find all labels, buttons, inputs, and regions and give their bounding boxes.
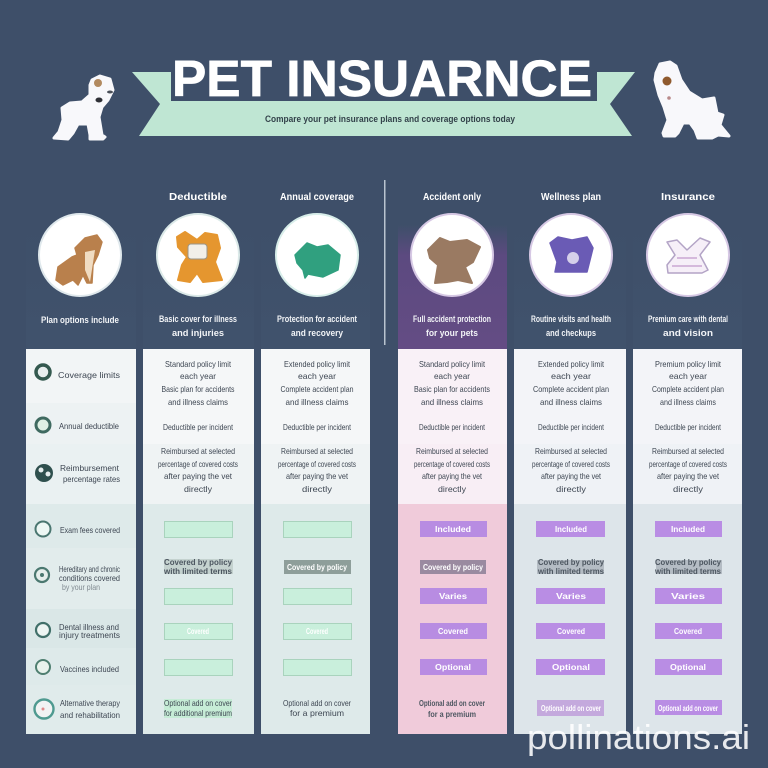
pills — [284, 522, 352, 676]
panel: plan 5: Deductible per incident — [655, 422, 721, 432]
row label text: Annual deductible — [59, 421, 119, 431]
panel: plan 4: directly — [556, 484, 587, 494]
row label text: Reimbursement — [60, 463, 120, 473]
panel: plan 4: Deductible per incident — [538, 422, 604, 432]
column headings — [169, 192, 715, 203]
panel: plan 5: Premium policy limit — [655, 359, 722, 369]
panel: plan 1: Covered — [187, 627, 209, 636]
portrait captions: and recovery — [291, 328, 343, 338]
panel: plan 2: percentage of covered costs — [278, 459, 356, 469]
panel: plan 2: Deductible per incident — [283, 422, 351, 432]
panel: plan 5: Included — [671, 525, 705, 534]
panel: plan 2: Covered — [306, 627, 328, 636]
icon: dental — [36, 623, 50, 637]
portrait captions: Premium care with dental — [648, 314, 728, 324]
panel: plan 4: Complete accident plan — [533, 384, 609, 394]
row label text: Dental illness and — [59, 622, 119, 632]
panel: plan 3: for a premium — [428, 710, 476, 719]
icon: reimbursement — [35, 464, 53, 482]
panel: plan 5: Optional add on cover — [658, 704, 718, 713]
portrait captions: Protection for accident — [277, 314, 357, 324]
panel: plan 5: and illness claims — [660, 397, 716, 407]
panel: plan 3: percentage of covered costs — [414, 459, 490, 469]
panel: plan 1: and illness claims — [168, 397, 228, 407]
panel: plan 4: Covered by policy — [538, 558, 605, 567]
icon: exam fees — [36, 522, 50, 536]
pills — [655, 521, 722, 715]
panel: plan 4: Included — [555, 525, 587, 534]
icon: deductible — [36, 418, 50, 432]
row label text: Vaccines included — [60, 664, 119, 674]
panel: plan 2: each year — [298, 371, 336, 381]
panel: plan 2: Extended policy limit — [284, 359, 351, 369]
icon: wellness — [34, 700, 54, 718]
panel: plan 1: with limited terms — [163, 567, 233, 576]
panel: plan 3: directly — [438, 484, 467, 494]
panel: row labels — [26, 349, 136, 734]
panel: plan 2: Reimbursed at selected — [281, 446, 353, 456]
panel: plan 1: percentage of covered costs — [158, 459, 238, 469]
portrait captions: Full accident protection — [413, 314, 491, 324]
panel: plan 5: after paying the vet — [657, 471, 720, 481]
portrait captions: and injuries — [172, 328, 224, 338]
plan portrait 3 — [276, 214, 358, 296]
panel: plan 4: after paying the vet — [541, 471, 602, 481]
column headings: Deductible — [169, 192, 227, 203]
panel: plan 3: Covered by policy — [423, 563, 483, 572]
panel: plan 4: Optional add on cover — [541, 704, 601, 713]
panel: plan 2: directly — [302, 484, 333, 494]
title banner ribbon — [132, 72, 635, 136]
panel: plan 5: Optional — [670, 663, 706, 672]
panel: plan 3: Varies — [439, 592, 468, 601]
plan portrait 5 — [530, 214, 612, 296]
pills — [536, 521, 605, 716]
panel: plan 2 — [261, 349, 370, 734]
row label text — [58, 370, 121, 720]
panel: plan 4: and illness claims — [540, 397, 602, 407]
panel: plan 2: for a premium — [290, 708, 344, 718]
panel: plan 2: and illness claims — [286, 397, 348, 407]
panel: plan 1: Standard policy limit — [165, 359, 232, 369]
portrait captions: and vision — [663, 328, 713, 338]
row label text: Hereditary and chronic — [59, 564, 121, 574]
pills — [420, 521, 487, 675]
panel: plan 5: with limited terms — [654, 567, 722, 576]
panel: plan 3: Deductible per incident — [419, 422, 485, 432]
panel: plan 3: each year — [434, 371, 470, 381]
icon: vaccines — [36, 660, 50, 674]
row label text: by your plan — [62, 582, 100, 592]
panel: plan 4: percentage of covered costs — [532, 459, 610, 469]
icon: right dog — [655, 62, 729, 138]
subtitle: Compare your pet insurance plans and coverage options today — [265, 114, 515, 124]
panel: plan 1: Reimbursed at selected — [161, 446, 235, 456]
panel: plan 3: and illness claims — [421, 397, 483, 407]
row label text: Alternative therapy — [60, 698, 121, 708]
panel: plan 1: after paying the vet — [164, 471, 233, 481]
column backdrops — [26, 225, 742, 349]
icon: left dog — [54, 76, 113, 139]
panel: plan 1: for additional premium — [164, 708, 232, 718]
title backing plate — [171, 57, 597, 101]
row label text: conditions covered — [59, 573, 120, 583]
column headings: Wellness plan — [541, 192, 601, 203]
panel: plan 3: Basic plan for accidents — [414, 384, 490, 394]
plan portrait 2 — [157, 214, 239, 296]
plan portrait 4 — [411, 214, 493, 296]
divider — [384, 180, 386, 345]
panel: plan 3: Optional add on cover — [419, 699, 485, 708]
panel: plan 3: Standard policy limit — [419, 359, 486, 369]
panel: plan 5: Covered by policy — [655, 558, 722, 567]
portrait captions: for your pets — [426, 328, 478, 338]
row label text: Exam fees covered — [60, 525, 120, 535]
plan portrait 1 — [39, 214, 121, 296]
panel: plan 5: Complete accident plan — [652, 384, 724, 394]
column headings: Insurance — [661, 192, 715, 203]
panel: plan 1 — [143, 349, 254, 734]
panel: plan 5: each year — [669, 371, 707, 381]
column headings: Accident only — [423, 192, 481, 203]
panel: plan 3: Reimbursed at selected — [416, 446, 488, 456]
panel: plan 5: percentage of covered costs — [649, 459, 727, 469]
panel: plan 1: Basic plan for accidents — [162, 384, 234, 394]
portrait captions: Routine visits and health — [531, 314, 611, 324]
panel: plan 5: directly — [673, 484, 704, 494]
panel: plan 3: Optional — [435, 663, 471, 672]
panel: plan 4: Varies — [556, 592, 587, 601]
panel: plan 5 — [633, 349, 742, 734]
panel: plan 3: Covered — [438, 627, 468, 636]
watermark: pollinations.ai — [527, 719, 750, 757]
panel: plan 4: Covered — [557, 627, 585, 636]
panel: plan 4: Reimbursed at selected — [535, 446, 607, 456]
icon: coverage — [36, 365, 50, 379]
icon: hereditary — [35, 568, 49, 582]
portrait captions: Basic cover for illness — [159, 314, 237, 324]
portrait captions — [41, 314, 728, 338]
row label text: percentage rates — [63, 474, 120, 484]
panel: plan 2: Covered by policy — [287, 563, 347, 572]
panel: plan 1: Optional add on cover — [164, 698, 232, 708]
portrait captions: Plan options include — [41, 315, 119, 325]
panel: plan 4: with limited terms — [537, 567, 605, 576]
panel: plan 4: Extended policy limit — [538, 359, 605, 369]
title: PET INSUARNCE — [172, 50, 592, 107]
panel: plan 5: Covered — [674, 627, 702, 636]
row label text: and rehabilitation — [60, 710, 120, 720]
panel: plan 1: Covered by policy — [164, 558, 233, 567]
row label text: injury treatments — [59, 630, 120, 640]
panel: plan 5: Varies — [671, 592, 706, 601]
plan portrait 6 — [647, 214, 729, 296]
column headings: Annual coverage — [280, 192, 354, 203]
panel: plan 4: Optional — [552, 663, 590, 672]
panel: plan 3: after paying the vet — [422, 471, 483, 481]
panel: plan 1: each year — [180, 371, 216, 381]
panel: plan 2: Complete accident plan — [280, 384, 354, 394]
panel: plan 5: Reimbursed at selected — [652, 446, 724, 456]
row label text: Coverage limits — [58, 370, 120, 380]
panel: plan 3 — [398, 349, 507, 734]
panel: plan 3: Included — [435, 525, 471, 534]
panel: plan 1: Deductible per incident — [163, 422, 234, 432]
panel: plan 4 — [514, 349, 626, 734]
pills — [164, 522, 232, 676]
panel: plan 2: after paying the vet — [286, 471, 349, 481]
panel: plan 4: each year — [551, 371, 591, 381]
panel: plan 1: directly — [184, 484, 213, 494]
portrait captions: and checkups — [546, 328, 596, 338]
panel: plan 2: Optional add on cover — [283, 698, 351, 708]
